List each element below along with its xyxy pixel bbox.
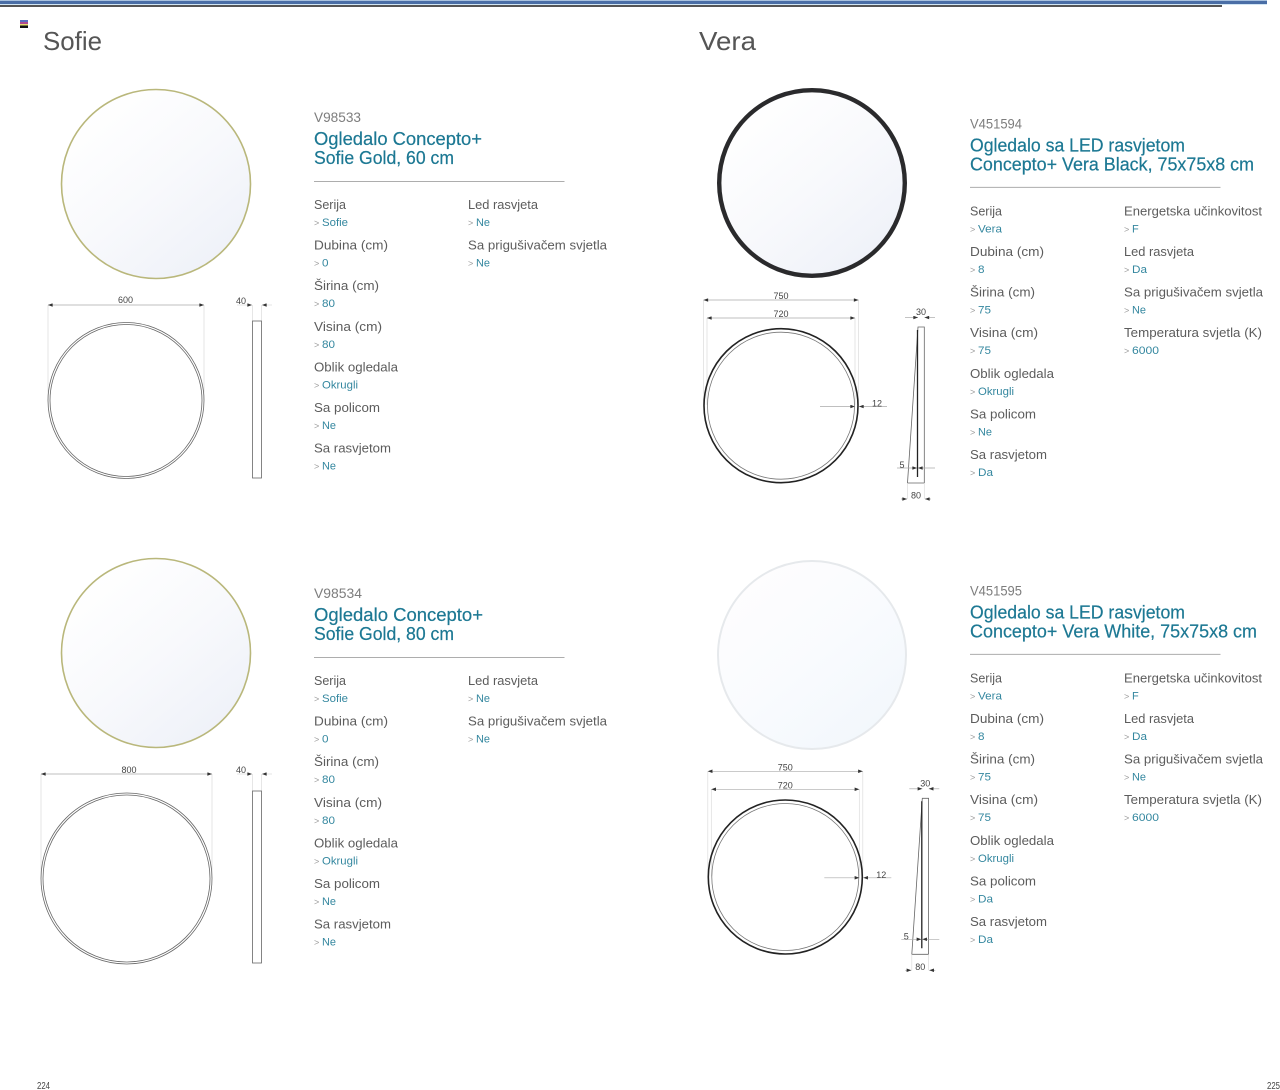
spec: Energetska učinkovitost: F (1132, 690, 1139, 702)
spec: Oblik ogledala (970, 366, 1055, 398)
spec: Širina: Širina (cm) (314, 754, 379, 769)
spec: Visina: 80 (322, 339, 335, 351)
specification list (970, 670, 1264, 946)
spec: Dubina: 0 (322, 258, 328, 270)
spec: Sa rasvjetom: Da (978, 934, 994, 946)
spec: Sa prigušivačem svjetla: > (468, 735, 473, 745)
spec: Oblik ogledala: > (970, 854, 975, 864)
technical drawing: Vera black: 80 (911, 490, 921, 500)
technical drawing: Sofie 80 cm: 40 (236, 765, 246, 775)
spec: Serija (314, 673, 348, 705)
spec: Oblik ogledala: Oblik ogledala (970, 833, 1055, 848)
spec: Led rasvjeta: > (1124, 265, 1129, 275)
heading: Sofie: Sofie (43, 26, 102, 56)
spec: Sa rasvjetom (970, 914, 1047, 946)
spec: Temperatura svjetla: 6000 (1132, 812, 1159, 824)
spec: Širina (970, 285, 1035, 317)
spec: Sa rasvjetom: Ne (322, 937, 336, 949)
technical drawing: Sofie 60 cm: 600 (118, 295, 133, 305)
spec: Širina: Širina (cm) (970, 752, 1035, 767)
product title (314, 605, 483, 644)
spec: Serija: Sofie (322, 217, 348, 229)
spec: Temperatura svjetla (1124, 792, 1262, 824)
spec: Dubina: Dubina (cm) (970, 711, 1044, 726)
technical drawing: Vera black (704, 291, 935, 500)
technical drawing: Vera white: 720 (778, 780, 793, 790)
product code: V98534 (314, 585, 362, 601)
spec: Visina: Visina (cm) (970, 325, 1038, 340)
spec: Oblik ogledala: Okrugli (978, 386, 1014, 398)
product title: Ogledalo Concepto+ (314, 129, 482, 149)
spec: Oblik ogledala (970, 833, 1055, 865)
spec: Dubina (970, 244, 1044, 276)
spec: Sa rasvjetom: > (314, 938, 319, 948)
spec: Oblik ogledala: Oblik ogledala (314, 835, 399, 850)
spec: Sa rasvjetom: Sa rasvjetom (314, 441, 391, 456)
spec: Oblik ogledala: > (314, 380, 319, 390)
product title: Ogledalo sa LED rasvjetom (970, 135, 1185, 155)
spec: Sa policom: Ne (978, 426, 992, 438)
spec: Dubina: Dubina (cm) (314, 238, 388, 253)
spec: Dubina: Dubina (cm) (314, 714, 388, 729)
spec: Sa prigušivačem svjetla: Sa prigušivačem svjetla (468, 714, 608, 729)
product: V451594 details (970, 115, 1264, 479)
spec: Sa rasvjetom (314, 917, 391, 949)
technical drawing: Sofie 80 cm (41, 765, 272, 964)
spec: Led rasvjeta: > (468, 694, 473, 704)
spec: Temperatura svjetla: Temperatura svjetla (K) (1124, 792, 1262, 807)
spec: Sa rasvjetom: Ne (322, 461, 336, 473)
spec: Sa prigušivačem svjetla: Ne (476, 258, 490, 270)
product code: V451594 (970, 115, 1022, 131)
technical drawing: Sofie 60 cm (48, 295, 272, 478)
spec: Oblik ogledala: Okrugli (322, 855, 358, 867)
spec: Temperatura svjetla: > (1124, 813, 1129, 823)
product title: Ogledalo Concepto+ (314, 605, 483, 625)
spec: Oblik ogledala: Oblik ogledala (970, 366, 1055, 381)
spec: Led rasvjeta: Ne (476, 217, 490, 229)
spec: Širina: > (314, 299, 319, 309)
spec: Serija: > (314, 218, 319, 228)
spec: Dubina (314, 714, 388, 746)
spec: Visina: > (970, 813, 975, 823)
spec: Serija: > (314, 694, 319, 704)
spec: Serija: Serija (314, 673, 347, 688)
spec: Led rasvjeta (1124, 711, 1195, 743)
spec: Serija: > (970, 224, 975, 234)
spec: Širina: > (970, 306, 975, 316)
spec: Visina: > (970, 346, 975, 356)
product code: V98533 (314, 109, 361, 125)
spec: Led rasvjeta: Ne (476, 693, 490, 705)
spec: Širina: 80 (322, 774, 335, 786)
spec: Visina (970, 325, 1038, 357)
spec: Temperatura svjetla (1124, 325, 1262, 357)
spec: Oblik ogledala: Oblik ogledala (314, 359, 399, 374)
spec: Sa rasvjetom: Sa rasvjetom (970, 447, 1047, 462)
spec: Širina: 80 (322, 298, 335, 310)
spec: Energetska učinkovitost (1124, 203, 1262, 235)
spec: Sa rasvjetom: Da (978, 467, 994, 479)
product title: Sofie Gold, 80 cm (314, 624, 454, 644)
spec: Visina: Visina (cm) (970, 792, 1038, 807)
spec: Dubina: 8 (978, 731, 984, 743)
spec: Sa policom: > (314, 897, 319, 907)
spec: Širina: Širina (cm) (970, 285, 1035, 300)
spec: Led rasvjeta: Led rasvjeta (1124, 711, 1195, 726)
spec: Visina: 75 (978, 345, 991, 357)
spec: Sa policom (314, 876, 380, 908)
spec: Energetska učinkovitost: Energetska učinkovitost (1124, 670, 1262, 685)
spec: Sa prigušivačem svjetla: > (1124, 773, 1129, 783)
spec: Sa prigušivačem svjetla: Sa prigušivačem svjetla (468, 238, 608, 253)
spec: Visina (314, 795, 382, 827)
spec: Dubina: > (314, 735, 319, 745)
spec: Sa policom: Sa policom (970, 406, 1036, 421)
product title: Concepto+ Vera White, 75x75x8 cm (970, 621, 1257, 641)
spec: Sa rasvjetom: > (314, 462, 319, 472)
spec: Dubina: Dubina (cm) (970, 244, 1044, 259)
technical drawing: Vera black: 5 (899, 460, 905, 470)
specification list (314, 197, 608, 473)
product: V451595 details (970, 582, 1264, 946)
spec: Led rasvjeta (1124, 244, 1195, 276)
spec: Sa prigušivačem svjetla: > (1124, 306, 1129, 316)
spec: Temperatura svjetla: Temperatura svjetla (K) (1124, 325, 1262, 340)
spec: Led rasvjeta: Da (1132, 264, 1148, 276)
spec: Oblik ogledala (314, 359, 399, 391)
spec: Energetska učinkovitost: F (1132, 223, 1139, 235)
spec: Širina: 75 (978, 772, 991, 784)
spec: Sa policom: Sa policom (314, 876, 380, 891)
spec: Energetska učinkovitost: > (1124, 224, 1129, 234)
spec: Dubina (314, 238, 388, 270)
spec: Sa policom: > (970, 894, 975, 904)
spec: Sa policom: Sa policom (314, 400, 380, 415)
spec: Serija: Vera (978, 690, 1003, 702)
spec: Širina (314, 278, 379, 310)
spec: Sa prigušivačem svjetla: Sa prigušivačem svjetla (1124, 285, 1264, 300)
spec: Energetska učinkovitost: > (1124, 691, 1129, 701)
spec: Visina (314, 319, 382, 351)
spec: Sa policom: > (314, 421, 319, 431)
spec: Serija: Serija (970, 203, 1003, 218)
product photo: Sofie gold mirror 60 cm (62, 90, 250, 278)
product title: Ogledalo sa LED rasvjetom (970, 602, 1185, 622)
spec: Sa rasvjetom: Sa rasvjetom (970, 914, 1047, 929)
spec: Serija (970, 670, 1003, 702)
spec: Širina: 75 (978, 305, 991, 317)
spec: Sa prigušivačem svjetla: Ne (476, 734, 490, 746)
spec: Sa policom (970, 406, 1036, 438)
spec: Sa prigušivačem svjetla (468, 714, 608, 746)
spec: Sa rasvjetom: > (970, 468, 975, 478)
spec: Širina: > (314, 775, 319, 785)
technical drawing: Vera white (708, 762, 939, 972)
technical drawing: Sofie 60 cm: 40 (236, 296, 246, 306)
spec: Sa rasvjetom (314, 441, 391, 473)
spec: Oblik ogledala: > (314, 856, 319, 866)
product title: Concepto+ Vera Black, 75x75x8 cm (970, 154, 1254, 174)
spec: Energetska učinkovitost: Energetska učinkovitost (1124, 203, 1262, 218)
spec: Dubina: > (314, 259, 319, 269)
spec: Sa prigušivačem svjetla: Ne (1132, 305, 1146, 317)
technical drawing: Sofie 80 cm: 800 (121, 765, 137, 775)
technical drawing: Vera white: 750 (778, 762, 793, 772)
spec: Dubina: 0 (322, 734, 328, 746)
product photo: Vera black mirror (719, 90, 905, 276)
spec: Dubina: > (970, 265, 975, 275)
spec: Sa policom (314, 400, 380, 432)
spec: Sa prigušivačem svjetla (1124, 285, 1264, 317)
icon: colour registration mark (20, 20, 28, 28)
product title (970, 135, 1254, 174)
spec: Sa policom: Da (978, 893, 994, 905)
spec: Dubina: > (970, 732, 975, 742)
top header bars (0, 0, 1267, 7)
spec: Visina: Visina (cm) (314, 795, 382, 810)
spec: Dubina: 8 (978, 264, 984, 276)
spec: Led rasvjeta: Da (1132, 731, 1148, 743)
spec: Visina: Visina (cm) (314, 319, 382, 334)
spec: Serija: Vera (978, 223, 1003, 235)
spec: Visina (970, 792, 1038, 824)
spec: Led rasvjeta (468, 197, 539, 229)
spec: Visina: > (314, 340, 319, 350)
product title: Sofie Gold, 60 cm (314, 148, 454, 168)
spec: Oblik ogledala: > (970, 387, 975, 397)
spec: Sa policom: Sa policom (970, 873, 1036, 888)
spec: Sa policom: Ne (322, 420, 336, 432)
spec: Led rasvjeta: > (468, 218, 473, 228)
technical drawing: Vera white: 30 (920, 778, 930, 788)
spec: Sa policom: > (970, 427, 975, 437)
spec: Serija: > (970, 691, 975, 701)
product title (970, 602, 1257, 641)
technical drawing: Vera black: 720 (773, 309, 789, 319)
spec: Serija (314, 197, 348, 229)
technical drawing: Vera white: 12 (876, 870, 886, 880)
spec: Dubina (970, 711, 1044, 743)
spec: Širina: > (970, 773, 975, 783)
technical drawing: Vera white: 5 (904, 931, 909, 941)
spec: Serija: Serija (970, 670, 1003, 685)
spec: Širina (314, 754, 379, 786)
product photo: Vera white mirror (718, 561, 906, 749)
spec: Sa prigušivačem svjetla: Sa prigušivačem svjetla (1124, 752, 1264, 767)
spec: Temperatura svjetla: 6000 (1132, 345, 1159, 357)
spec: Sa policom: Ne (322, 896, 336, 908)
technical drawing: Vera white: 80 (915, 962, 925, 972)
technical drawing: Vera black: 12 (872, 398, 882, 408)
spec: Sa policom (970, 873, 1036, 905)
spec: Energetska učinkovitost (1124, 670, 1262, 702)
specification list (314, 673, 608, 949)
spec: Serija (970, 203, 1003, 235)
spec: Oblik ogledala (314, 835, 399, 867)
spec: Temperatura svjetla: > (1124, 346, 1129, 356)
spec: Oblik ogledala: Okrugli (322, 379, 358, 391)
spec: Sa rasvjetom: Sa rasvjetom (314, 917, 391, 932)
product code: V451595 (970, 582, 1022, 598)
spec: Širina (970, 752, 1035, 784)
technical drawing: Vera black: 750 (773, 291, 789, 301)
spec: Led rasvjeta: Led rasvjeta (468, 197, 539, 212)
spec: Oblik ogledala: Okrugli (978, 853, 1014, 865)
product photo: Sofie gold mirror 80 cm (62, 558, 250, 748)
spec: Sa prigušivačem svjetla (468, 238, 608, 270)
spec: Serija: Serija (314, 197, 347, 212)
product: V98534 details (314, 585, 608, 949)
spec: Visina: 75 (978, 812, 991, 824)
spec: Sa prigušivačem svjetla: Ne (1132, 772, 1146, 784)
spec: Sa prigušivačem svjetla: > (468, 259, 473, 269)
spec: Visina: 80 (322, 815, 335, 827)
spec: Širina: Širina (cm) (314, 278, 379, 293)
technical drawing: Vera black: 30 (916, 307, 926, 317)
spec: Sa rasvjetom (970, 447, 1047, 479)
product: V98533 details (314, 109, 608, 473)
spec: Sa prigušivačem svjetla (1124, 752, 1264, 784)
product title (314, 129, 482, 168)
spec: Led rasvjeta: Led rasvjeta (468, 673, 539, 688)
heading: Vera: Vera (699, 26, 757, 56)
spec: Sa rasvjetom: > (970, 935, 975, 945)
specification list (970, 203, 1264, 479)
spec: Visina: > (314, 816, 319, 826)
spec: Led rasvjeta: Led rasvjeta (1124, 244, 1195, 259)
spec: Serija: Sofie (322, 693, 348, 705)
spec: Led rasvjeta (468, 673, 539, 705)
spec: Led rasvjeta: > (1124, 732, 1129, 742)
